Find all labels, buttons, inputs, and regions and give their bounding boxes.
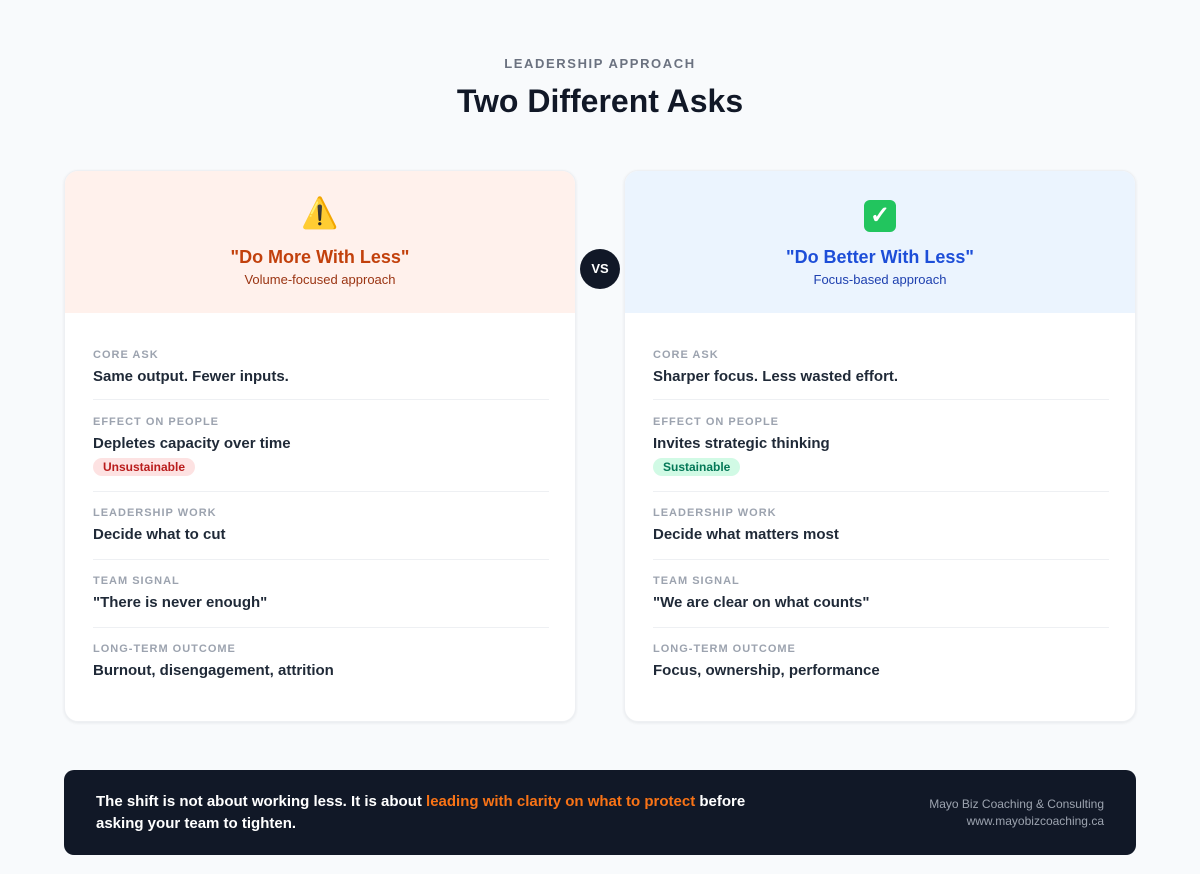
panel: do more with less [64, 170, 576, 722]
row: leadership work: LEADERSHIP WORK [653, 507, 777, 519]
row: core ask: CORE ASK [653, 349, 719, 361]
row: outcome: LONG-TERM OUTCOME [93, 643, 236, 655]
icon: warning: ⚠️ [301, 197, 339, 230]
row: leadership work: Decide what to cut [93, 526, 226, 543]
row: leadership work: Decide what matters most [653, 526, 839, 543]
row: core ask [93, 349, 289, 385]
row: team signal [93, 575, 267, 611]
row: team signal: TEAM SIGNAL [93, 575, 180, 587]
row: effect: Invites strategic thinking [653, 435, 830, 452]
row: core ask: CORE ASK [93, 349, 159, 361]
row: effect: Depletes capacity over time [93, 435, 291, 452]
row: team signal: "We are clear on what counts" [653, 594, 870, 611]
panel: do better with less [624, 170, 1136, 722]
row: core ask: Same output. Fewer inputs. [93, 368, 289, 385]
footer brand [929, 797, 1104, 828]
heading left: "Do More With Less" [231, 247, 409, 267]
row: outcome [93, 643, 334, 679]
eyebrow: LEADERSHIP APPROACH [504, 56, 696, 71]
footer callout [64, 770, 1136, 855]
row: effect: Sustainable [663, 460, 730, 474]
footer text: The shift is not about working less. It is about leading with clarity on what to protect before asking your team to tighten. [96, 793, 745, 832]
row: outcome: Focus, ownership, performance [653, 662, 880, 679]
row: effect [653, 416, 830, 476]
row: leadership work [93, 507, 226, 543]
subtitle left: Volume-focused approach [244, 272, 396, 287]
row: effect: EFFECT ON PEOPLE [93, 416, 219, 428]
row: team signal: "There is never enough" [93, 594, 267, 611]
vs badge: VS [591, 261, 609, 276]
row: effect: Unsustainable [103, 460, 185, 474]
row: effect: EFFECT ON PEOPLE [653, 416, 779, 428]
header left [65, 171, 575, 313]
vs badge [580, 249, 620, 289]
row: team signal [653, 575, 870, 611]
title: Two Different Asks [457, 83, 743, 119]
row: outcome: LONG-TERM OUTCOME [653, 643, 796, 655]
row: core ask: Sharper focus. Less wasted effort. [653, 368, 898, 385]
row: leadership work: LEADERSHIP WORK [93, 507, 217, 519]
header right [625, 171, 1135, 313]
row: leadership work [653, 507, 839, 543]
footer brand: www.mayobizcoaching.ca [967, 814, 1104, 828]
row: outcome [653, 643, 880, 679]
icon: check: ✓ [870, 202, 890, 229]
row: effect [93, 416, 291, 476]
row: outcome: Burnout, disengagement, attrition [93, 662, 334, 679]
subtitle right: Focus-based approach [814, 272, 946, 287]
footer brand: Mayo Biz Coaching & Consulting [929, 797, 1104, 811]
heading right: "Do Better With Less" [786, 247, 974, 267]
row: core ask [653, 349, 898, 385]
row: team signal: TEAM SIGNAL [653, 575, 740, 587]
